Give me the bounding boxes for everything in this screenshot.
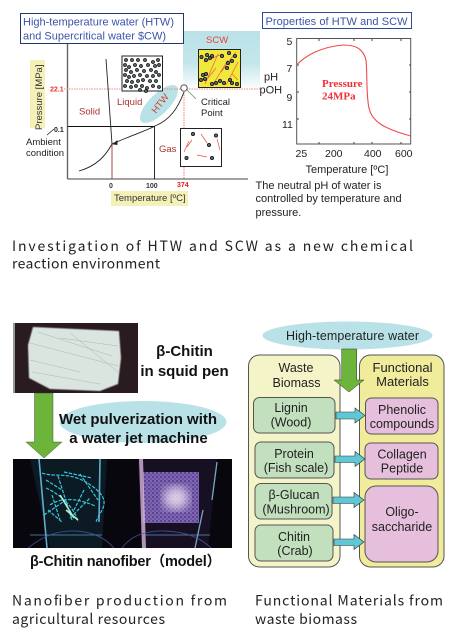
column headings: Waste (279, 361, 314, 375)
ambient condition (26, 127, 64, 159)
axes (68, 44, 248, 179)
SCW molecules box (198, 50, 240, 88)
box: collagen (365, 443, 438, 479)
box: oligosaccharide (365, 486, 438, 562)
phase labels: SCW (206, 35, 228, 46)
pressure axis label (30, 60, 45, 130)
photo: nanofiber (13, 459, 232, 548)
box: chitin: Chitin (278, 530, 310, 544)
box: collagen: Collagen (377, 448, 427, 462)
note text: pressure. (256, 207, 301, 219)
pressure annotation: 24MPa (322, 90, 356, 102)
box: chitin (255, 525, 333, 561)
note text: controlled by temperature and (256, 193, 402, 205)
title box: and Supercritical water $CW) (23, 30, 166, 42)
title box: High-temperature water (HTW) (23, 16, 174, 28)
box: chitin: (Crab) (277, 544, 313, 558)
box: glucan (255, 484, 332, 519)
title box (20, 14, 184, 44)
gas molecules box (180, 128, 222, 166)
phase labels: Gas (159, 144, 177, 155)
critical point label: Critical (201, 97, 230, 108)
callout: high temperature water (262, 322, 432, 350)
box: protein (255, 442, 334, 478)
panel: phase diagram (20, 14, 260, 206)
phase labels: Solid (79, 106, 100, 118)
phase labels: HTW (150, 92, 172, 116)
y axis labels: pOH (260, 84, 282, 96)
box: phenolic: compounds (370, 417, 434, 431)
phase labels (79, 35, 228, 155)
caption: nanofiber: agricultural resources (12, 609, 165, 629)
HTW region ellipse (134, 79, 184, 129)
axis values: 374 (177, 182, 189, 189)
column headings: Materials (376, 374, 429, 389)
critical point label: Point (201, 108, 223, 119)
critical guide lines (64, 89, 260, 179)
critical point leader (187, 90, 196, 99)
x axis labels: 600 (395, 148, 413, 160)
photo: squid pen (13, 323, 138, 393)
column headings (273, 360, 433, 390)
y axis labels: pH (264, 72, 278, 84)
chart title: Properties of HTW and SCW (266, 16, 408, 28)
callout: high temperature water: High-temperature water (286, 329, 419, 343)
pH curve (297, 45, 411, 136)
caption: functional materials: waste biomass (255, 609, 357, 629)
functional materials column (360, 355, 444, 567)
box: oligosaccharide: saccharide (372, 520, 432, 534)
heading: nanofiber: β-Chitin nanofiber（model） (30, 553, 221, 570)
liquid molecules box (122, 56, 162, 92)
column headings: Functional (373, 360, 433, 375)
panel: nanofiber production (13, 323, 232, 570)
x axis labels (296, 148, 413, 176)
axis values (50, 86, 189, 190)
box: phenolic: Phenolic (378, 403, 426, 417)
caption: nanofiber: Nanofiber production from (12, 590, 227, 610)
axis values: 0 (109, 183, 113, 190)
pressure annotation: Pressure (322, 78, 363, 90)
phase curves (79, 59, 184, 179)
temperature axis label: Temperature [ºC] (114, 193, 186, 204)
critical point marker (181, 85, 187, 91)
caption: functional materials: Functional Materials from (255, 590, 443, 610)
axis values: 22.1 (50, 86, 64, 94)
phase labels: Liquid (117, 97, 142, 108)
box: lignin: (Wood) (271, 416, 311, 430)
callout: wet pulverization: Wet pulverization with (59, 411, 217, 428)
y axis labels: 7 (286, 63, 292, 75)
box: protein: Protein (274, 447, 314, 461)
ambient condition: 0.1 (54, 127, 64, 134)
plot frame (297, 38, 411, 144)
box: phenolic (366, 398, 438, 434)
y axis labels: 11 (282, 119, 293, 131)
box: lignin: Lignin (274, 401, 308, 415)
box: protein: (Fish scale) (264, 461, 328, 475)
y axis labels: 9 (286, 92, 292, 104)
temperature axis label (111, 191, 188, 206)
box: glucan: β-Glucan (269, 488, 320, 502)
x axis labels: Temperature [ºC] (306, 164, 388, 176)
panel: pH chart (256, 12, 413, 219)
y axis labels: 5 (286, 36, 292, 48)
heading: beta chitin: β-Chitin (156, 343, 213, 360)
box: lignin (254, 398, 335, 433)
caption: top: reaction environment (12, 254, 161, 274)
box: oligosaccharide: Oligo- (385, 505, 419, 519)
pressure axis label: Pressure [MPa] (34, 65, 45, 130)
x axis labels: 200 (325, 148, 343, 160)
arrows: biomass to materials (333, 408, 365, 550)
x axis labels: 25 (296, 148, 307, 160)
waste biomass column (248, 355, 340, 567)
ticks (297, 39, 411, 144)
caption: top: Investigation of HTW and SCW as a new chemical (12, 236, 413, 256)
panel: functional materials (248, 322, 444, 567)
callout: wet pulverization (59, 401, 226, 447)
axis values: 100 (146, 183, 158, 190)
column headings: Biomass (273, 376, 320, 390)
ambient condition: condition (26, 148, 64, 159)
note text: The neutral pH of water is (256, 180, 382, 192)
ambient condition: Ambient (26, 137, 61, 148)
arrow: green down (26, 393, 62, 458)
box: glucan: (Mushroom) (262, 502, 330, 516)
heading: beta chitin: in squid pen (140, 363, 229, 380)
y axis labels (260, 36, 293, 131)
x axis labels: 400 (364, 148, 382, 160)
SCW region background (183, 31, 260, 90)
callout: wet pulverization: a water jet machine (69, 430, 208, 447)
arrow: green down (334, 349, 364, 392)
box: collagen: Peptide (381, 462, 423, 476)
